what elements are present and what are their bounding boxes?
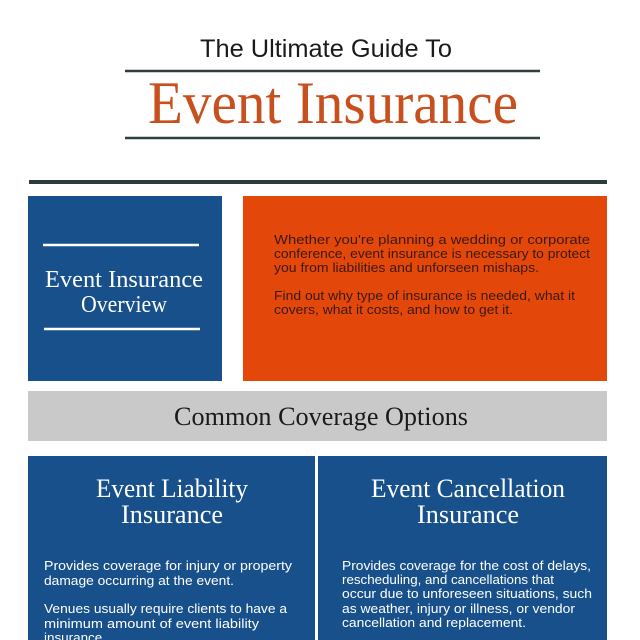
heading bar: common coverage options	[28, 391, 607, 441]
main title: event insurance: Event Insurance	[148, 70, 518, 136]
text block: liability description	[44, 559, 293, 640]
text block: cancellation description	[342, 559, 592, 630]
text block: liability description: Venues usually require clients to have a	[44, 602, 287, 616]
text block: intro	[274, 233, 591, 317]
heading: event liability insurance	[96, 474, 248, 529]
panel: event cancellation insurance	[318, 456, 607, 640]
text block: intro: covers, what it costs, and how to get it.	[274, 303, 513, 317]
title: the ultimate guide to: The Ultimate Guide To	[200, 35, 452, 63]
heading: event insurance overview: Overview	[81, 292, 168, 318]
heading: event liability insurance: Event Liability	[96, 474, 248, 503]
text block: cancellation description: Provides coverage for the cost of delays,	[342, 559, 591, 573]
heading: event cancellation insurance: Event Cancellation	[371, 474, 565, 503]
heading: event insurance overview	[45, 267, 203, 318]
text block: cancellation description: cancellation and replacement.	[342, 616, 526, 630]
heading: event cancellation insurance	[371, 474, 565, 529]
text block: liability description: damage occurring at the event.	[44, 574, 234, 588]
text block: liability description: minimum amount of event liability	[44, 617, 260, 631]
panel: intro text	[243, 196, 607, 381]
heading: event cancellation insurance: Insurance	[417, 500, 519, 529]
heading: event liability insurance: Insurance	[121, 500, 223, 529]
text block: liability description: Provides coverage for injury or property	[44, 559, 293, 573]
text block: intro: Whether you're planning a wedding or corporate	[274, 233, 590, 247]
text block: cancellation description: occur due to unforeseen situations, such	[342, 587, 592, 601]
text block: cancellation description: as weather, injury or illness, or vendor	[342, 602, 575, 616]
text block: cancellation description: rescheduling, and cancellations that	[342, 573, 555, 587]
text block: intro: conference, event insurance is necessary to protect	[274, 247, 591, 261]
heading bar: common coverage options: Common Coverage Options	[174, 402, 468, 431]
text block: intro: you from liabilities and unforseen mishaps.	[274, 261, 539, 275]
text block: intro: Find out why type of insurance is needed, what it	[274, 289, 576, 303]
heading: event insurance overview: Event Insurance	[45, 267, 203, 293]
panel: event liability insurance	[28, 456, 315, 640]
panel: overview heading	[28, 196, 222, 381]
